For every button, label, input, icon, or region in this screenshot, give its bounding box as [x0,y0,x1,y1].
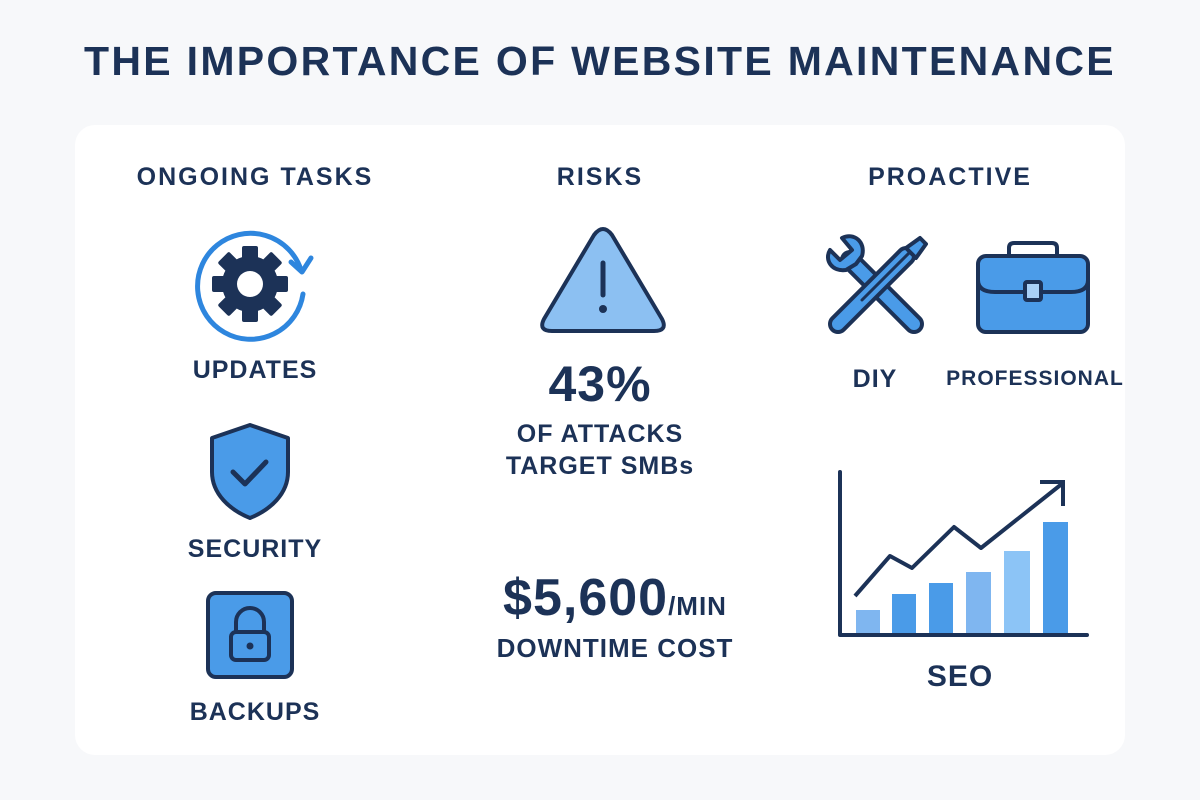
text: of attacks target SMBs: TARGET SMBs [506,452,694,480]
heading: proactive: PROACTIVE [868,163,1032,191]
chart: SEO growth [838,470,1089,637]
stat: 43%: 43% [548,356,652,412]
heading: ongoing tasks: ONGOING TASKS [137,163,373,191]
text: downtime cost: DOWNTIME COST [497,633,733,663]
card background [75,125,1125,755]
label: updates: UPDATES [193,356,317,384]
stat: $5,600/min: $5,600/MIN [503,569,727,627]
icon: warning triangle [540,227,666,333]
icon: security shield [210,423,290,520]
icon: professional briefcase [976,241,1090,334]
title: THE IMPORTANCE OF WEBSITE MAINTENANCE [84,38,1116,84]
label: SEO: SEO [927,660,993,693]
text: of attacks target SMBs [506,420,694,480]
text: of attacks target SMBs: OF ATTACKS [517,420,683,448]
label: DIY: DIY [853,365,897,393]
heading: risks: RISKS [557,163,643,191]
label: security: SECURITY [188,535,322,563]
label: backups: BACKUPS [190,698,320,726]
label: professional: PROFESSIONAL [946,367,1124,390]
icon: updates gear [195,230,314,342]
icon: DIY tools [826,234,928,334]
icon: backups lock [206,591,294,679]
